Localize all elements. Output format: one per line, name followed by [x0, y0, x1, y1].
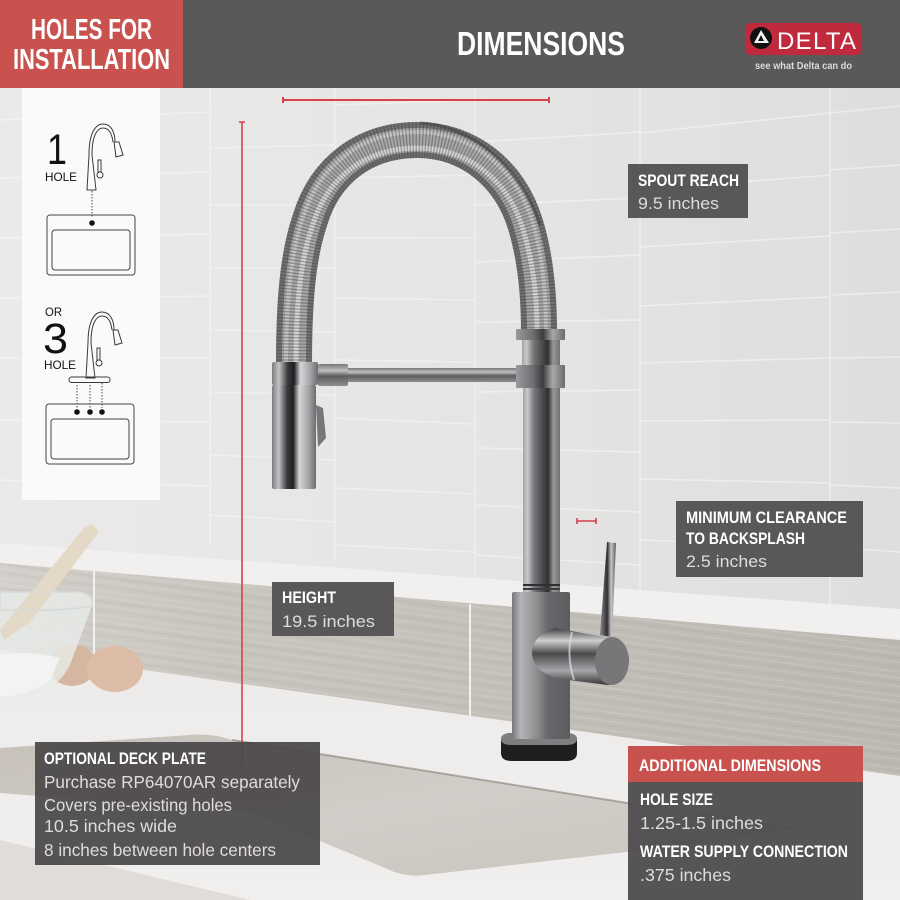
panel: additional dimensions: WATER SUPPLY CONNECTION	[640, 842, 848, 861]
one hole label: HOLE	[45, 170, 77, 184]
panel: additional dimensions: 1.25-1.5 inches	[640, 813, 763, 833]
callout: optional deck plate: OPTIONAL DECK PLATE	[44, 749, 206, 768]
one hole label	[45, 126, 77, 184]
callout: height: HEIGHT	[282, 588, 337, 607]
panel: additional dimensions: .375 inches	[640, 865, 731, 885]
faucet body	[512, 592, 570, 739]
sink basin	[0, 735, 800, 900]
three hole label: 3	[43, 315, 68, 363]
callout: minimum clearance	[676, 501, 863, 577]
handle cylinder	[532, 628, 629, 685]
holes heading: HOLES FOR	[31, 14, 152, 46]
callout: height	[272, 582, 394, 636]
icon: one-hole sink	[47, 191, 135, 275]
callout: minimum clearance: MINIMUM CLEARANCE	[686, 508, 847, 527]
three hole label: HOLE	[44, 358, 76, 372]
black base	[501, 733, 577, 761]
title: DIMENSIONS	[457, 25, 625, 62]
holes heading: INSTALLATION	[13, 44, 170, 76]
height arrow	[239, 122, 245, 766]
spring spout	[286, 123, 546, 364]
additional dimensions heading	[628, 746, 863, 782]
sprayer head	[272, 362, 326, 489]
Delta logo: DELTA	[777, 28, 856, 55]
stone tile band	[0, 563, 900, 776]
icon: three-hole faucet	[69, 312, 122, 382]
lever	[600, 542, 616, 637]
icon: three-hole sink	[46, 383, 134, 464]
icon: one-hole faucet	[87, 124, 123, 190]
callout: height: 19.5 inches	[282, 612, 375, 631]
callout: optional deck plate	[35, 742, 320, 865]
three hole label	[43, 305, 76, 372]
Delta logo: see what Delta can do	[755, 61, 852, 72]
faucet	[272, 123, 629, 761]
callout: optional deck plate: 10.5 inches wide	[44, 816, 177, 836]
callout: minimum clearance: TO BACKSPLASH	[686, 529, 805, 548]
header bar	[0, 0, 900, 88]
callout: optional deck plate: Covers pre-existing holes	[44, 795, 232, 815]
holes heading	[0, 0, 183, 88]
additional dimensions heading: ADDITIONAL DIMENSIONS	[639, 756, 821, 775]
column	[516, 329, 565, 592]
countertop	[0, 650, 900, 900]
three hole label: OR	[45, 305, 62, 319]
callout: minimum clearance: 2.5 inches	[686, 552, 767, 571]
callout: optional deck plate: 8 inches between hole centers	[44, 840, 276, 860]
backsplash ledge	[0, 543, 900, 640]
panel: additional dimensions	[628, 746, 863, 900]
arm	[340, 368, 530, 382]
spout reach arrow	[283, 97, 549, 103]
callout: spout reach: SPOUT REACH	[638, 171, 739, 190]
clearance arrow	[577, 518, 596, 524]
callout: spout reach	[628, 164, 748, 218]
callout: optional deck plate: Purchase RP64070AR separately	[44, 772, 300, 792]
panel: additional dimensions: HOLE SIZE	[640, 790, 713, 809]
callout: spout reach: 9.5 inches	[638, 194, 719, 213]
mixing bowl with spoon and eggs	[0, 524, 143, 697]
one hole label: 1	[47, 126, 67, 174]
Delta logo	[745, 23, 862, 72]
panel: hole options	[22, 88, 160, 500]
